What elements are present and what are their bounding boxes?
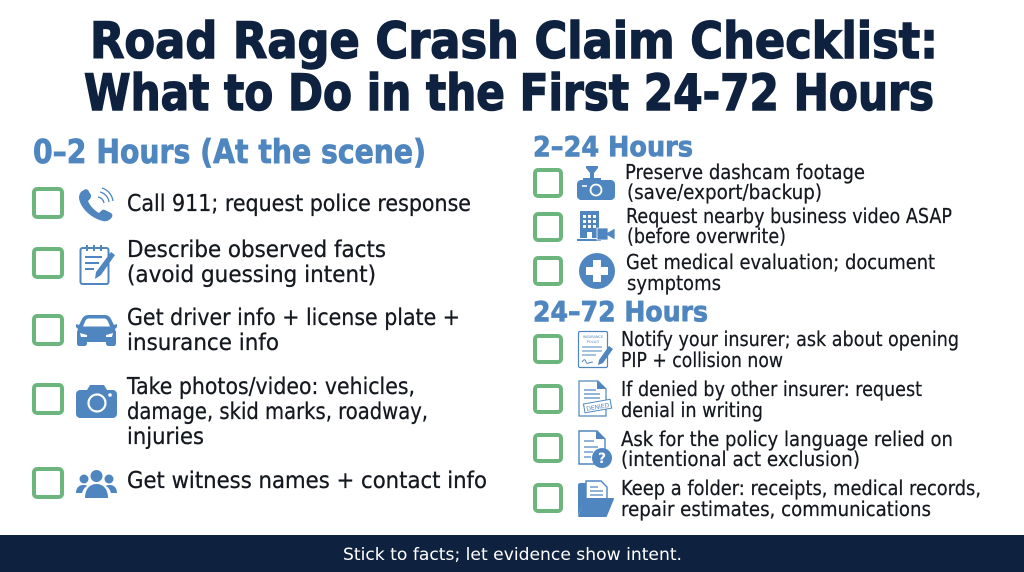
- item: keep a folder: [535, 476, 981, 521]
- item: photos and video: injuries: [127, 424, 204, 450]
- panel: 24-72 hours: [533, 295, 981, 521]
- item: medical evaluation: symptoms: [627, 271, 721, 295]
- item: denial in writing: [535, 377, 922, 422]
- item: medical evaluation: Get medical evaluation; document: [626, 250, 935, 274]
- item: notify insurer: INSURANCE: [583, 335, 603, 339]
- title: [84, 12, 938, 122]
- item: policy language: (intentional act exclusion): [621, 447, 860, 471]
- item: notify insurer: POLICY: [587, 340, 600, 344]
- item: policy language: Ask for the policy language relied on: [621, 427, 953, 451]
- item: witnesses: [34, 468, 487, 498]
- heading: 2-24 hours: 2–24 Hours: [533, 130, 693, 163]
- footer banner: [0, 535, 1024, 572]
- item: keep a folder: repair estimates, communications: [621, 497, 931, 521]
- item: denial in writing: denial in writing: [621, 398, 763, 422]
- item: describe facts: [34, 237, 386, 288]
- item: denial in writing: DENIED: [586, 402, 610, 413]
- footer banner: Stick to facts; let evidence show intent.: [343, 545, 682, 565]
- item: describe facts: Describe observed facts: [127, 237, 386, 263]
- panel: 0-2 hours: [33, 132, 487, 498]
- item: policy language: [535, 427, 953, 471]
- item: keep a folder: Keep a folder: receipts, medical records,: [621, 476, 981, 500]
- item: witnesses: Get witness names + contact info: [127, 468, 487, 494]
- item: dashcam: [535, 160, 865, 204]
- title: Road Rage Crash Claim Checklist:: [90, 12, 938, 70]
- item: describe facts: (avoid guessing intent): [127, 262, 376, 288]
- item: call 911: [34, 188, 471, 221]
- item: dashcam: (save/export/backup): [627, 180, 822, 204]
- item: medical evaluation: [535, 250, 935, 295]
- panel: 2-24 hours: [533, 130, 952, 295]
- item: photos and video: damage, skid marks, roadway,: [127, 399, 428, 425]
- item: business video: [535, 204, 952, 248]
- item: photos and video: [34, 374, 428, 450]
- item: business video: (before overwrite): [627, 224, 786, 248]
- item: notify insurer: PIP + collision now: [621, 348, 783, 372]
- item: call 911: Call 911; request police response: [127, 191, 471, 217]
- item: photos and video: Take photos/video: vehicles,: [126, 374, 415, 400]
- item: driver info: Get driver info + license plate +: [127, 305, 460, 331]
- item: notify insurer: [535, 327, 959, 372]
- item: driver info: [34, 305, 460, 356]
- item: business video: Request nearby business video ASAP: [626, 204, 952, 228]
- item: denial in writing: If denied by other insurer: request: [621, 377, 922, 401]
- item: driver info: insurance info: [127, 330, 279, 356]
- item: dashcam: Preserve dashcam footage: [625, 160, 865, 184]
- heading: 0-2 hours: 0–2 Hours (At the scene): [33, 132, 426, 171]
- item: policy language: ?: [598, 451, 606, 467]
- item: notify insurer: Notify your insurer; ask about opening: [621, 327, 959, 351]
- heading: 24-72 hours: 24–72 Hours: [533, 295, 708, 328]
